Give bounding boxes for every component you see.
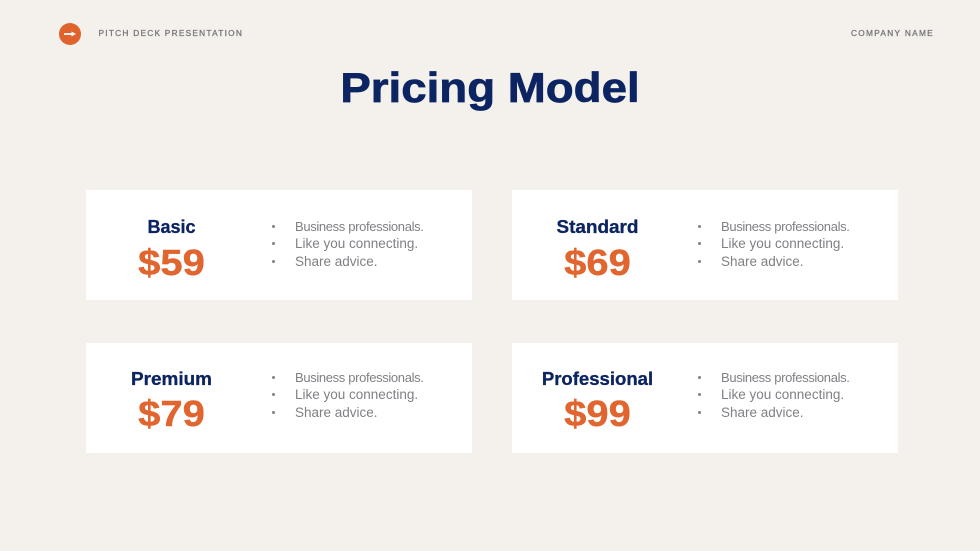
panel: Basic [86,190,472,300]
price: $69 [564,242,631,283]
plan name: Professional [542,368,653,388]
panel: Standard [512,190,898,300]
price: $59 [138,242,205,283]
feature list: Like you connecting. [721,387,844,402]
feature list: Share advice. [295,254,378,269]
feature list [272,370,424,420]
company name: COMPANY NAME [851,28,934,38]
feature list: Business professionals. [721,219,850,234]
feature list: Business professionals. [295,219,424,234]
plan name: Basic [147,216,196,236]
feature list: Share advice. [295,405,378,420]
feature list: Like you connecting. [295,387,418,402]
plan name: Premium [131,368,212,388]
feature list: Like you connecting. [721,236,844,251]
feature list: Share advice. [721,254,804,269]
panel: Professional [512,343,898,453]
plan name: Standard [557,216,638,236]
icon: arrow badge [59,23,81,45]
feature list: Business professionals. [295,370,424,385]
price: $99 [564,393,631,434]
feature list [272,219,424,269]
price: $79 [138,393,205,434]
feature list [698,219,850,269]
title: Pricing Model [340,64,640,110]
feature list: Like you connecting. [295,236,418,251]
feature list: Business professionals. [721,370,850,385]
feature list [698,370,850,420]
panel: Premium [86,343,472,453]
header label: PITCH DECK PRESENTATION [98,28,243,38]
feature list: Share advice. [721,405,804,420]
